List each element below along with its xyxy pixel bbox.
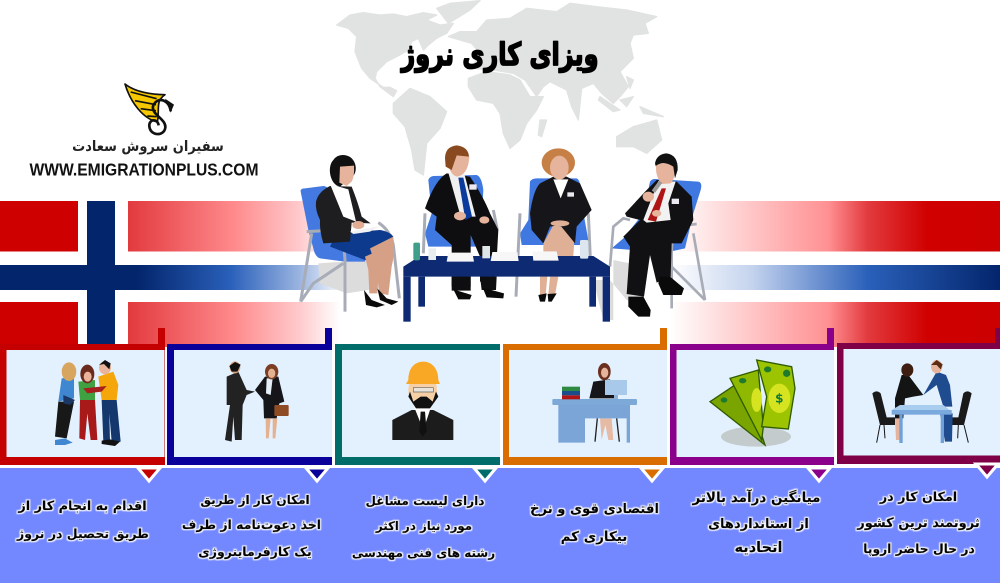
text — [182, 493, 321, 559]
text: رشته های فنی مهندسی — [352, 546, 495, 560]
icon: phoenix emblem — [125, 84, 174, 134]
icon: engineer with helmet — [392, 362, 453, 440]
text: اخذ دعوت‌نامه از طرف — [182, 517, 321, 532]
table items — [413, 240, 588, 262]
table — [403, 256, 610, 322]
person: woman taking notes — [301, 155, 399, 312]
text — [691, 489, 821, 556]
icon: three students with book — [55, 360, 121, 446]
text: امکان کار از طریق — [200, 493, 310, 507]
world map background — [337, 1, 663, 175]
icon: banknotes: $ — [775, 392, 784, 406]
text — [16, 499, 149, 541]
text: مورد نیاز در اکثر — [375, 519, 472, 534]
floor shadows — [318, 260, 647, 320]
panel 4: strong economy — [503, 328, 667, 545]
text: میانگین درآمد بالاتر — [691, 489, 821, 506]
triangle pointer — [808, 468, 830, 481]
frame — [167, 328, 332, 465]
triangle pointer — [474, 468, 496, 481]
text: اتحادیه — [734, 540, 782, 556]
text: ثروتمند ترین کشور — [856, 516, 980, 531]
text — [352, 494, 495, 560]
illustration: panel discussion — [301, 145, 705, 322]
text: بیکاری کم — [561, 529, 627, 545]
frame — [335, 344, 500, 465]
icon: banknotes — [710, 360, 795, 447]
text — [856, 489, 980, 556]
frame — [837, 328, 1000, 464]
icon: woman at desk — [552, 363, 637, 443]
triangle pointer — [138, 468, 160, 481]
panel 5: higher income — [670, 328, 834, 556]
triangle pointer — [641, 468, 663, 481]
text: در حال حاضر اروپا — [863, 542, 975, 556]
person: woman with auburn hair — [516, 148, 592, 302]
frame — [670, 328, 834, 465]
title: ویزای کاری نروژ — [400, 36, 599, 73]
panel 6: wealthiest country — [837, 328, 1000, 556]
icon: business handshake — [225, 361, 289, 442]
text: دارای لیست مشاغل — [366, 494, 484, 508]
text: امکان کار در — [879, 489, 957, 504]
panel 2: invitation route — [167, 328, 332, 559]
person: man with microphone — [610, 153, 705, 317]
person: man with blue tie — [423, 145, 504, 299]
text: طریق تحصیل در نروژ — [16, 526, 149, 541]
icon: handshake over table — [872, 360, 972, 443]
triangle pointer — [976, 464, 998, 477]
text — [530, 502, 659, 545]
website url: WWW.EMIGRATIONPLUS.COM — [30, 160, 258, 180]
text: اقتصادی قوی و نرخ — [530, 502, 659, 517]
frame — [503, 328, 667, 465]
panel 3: skilled jobs list — [335, 344, 500, 560]
panel 1: study route — [0, 328, 165, 541]
company name: سفیران سروش سعادت — [72, 138, 224, 155]
text: از استانداردهای — [708, 517, 809, 532]
text: اقدام به انجام کار از — [17, 499, 147, 514]
Norwegian flag background — [0, 201, 1000, 347]
bottom text band — [0, 468, 1000, 583]
logo — [30, 84, 258, 180]
text: یک کارفرماینروژی — [198, 544, 312, 559]
triangle pointer — [306, 468, 328, 481]
frame — [0, 328, 165, 465]
